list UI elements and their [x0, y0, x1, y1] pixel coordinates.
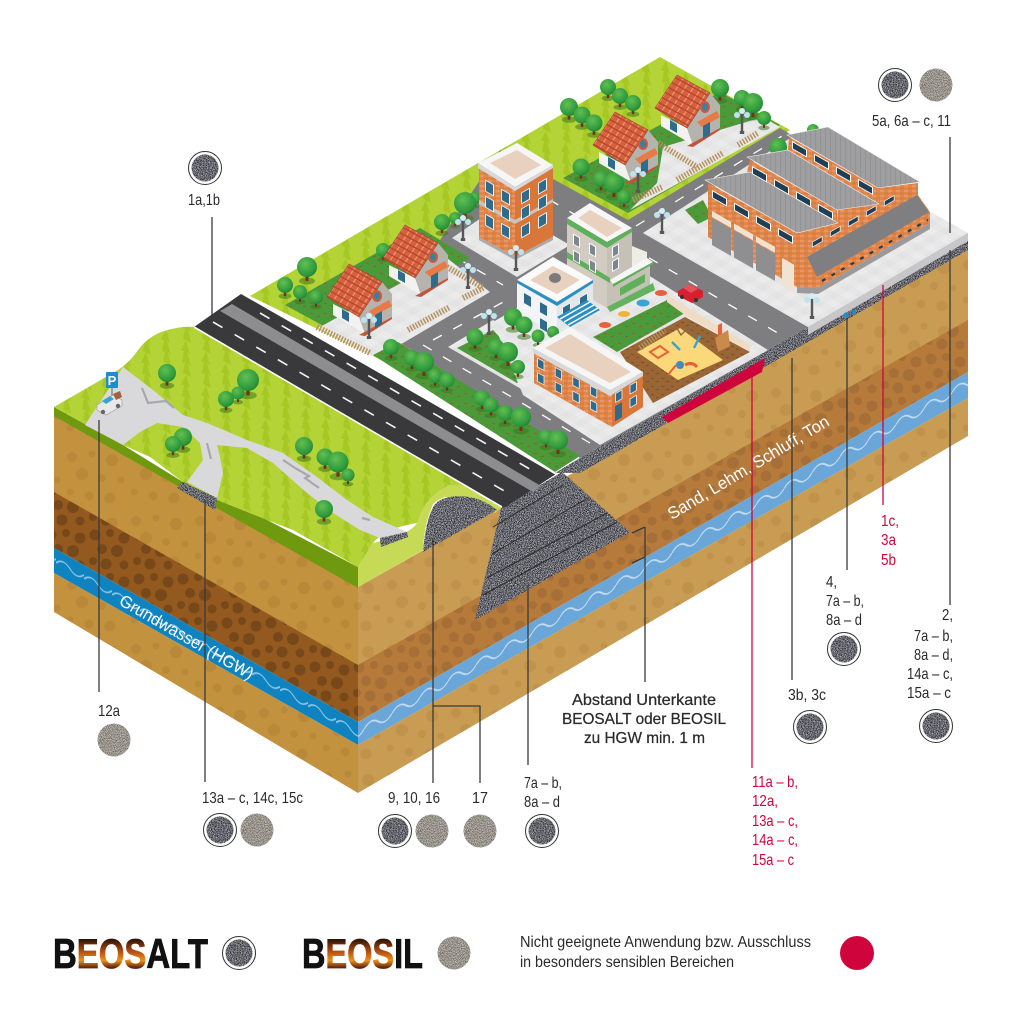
blue and white building	[517, 257, 600, 335]
houses	[327, 75, 720, 336]
right face lower sand layer	[358, 398, 968, 793]
playground dirt	[620, 317, 750, 403]
right face upper sand layer	[358, 245, 968, 667]
callout: groundwater distance: zu HGW min. 1 m	[584, 730, 705, 747]
label: 12a: 12a	[98, 703, 120, 720]
factory hall	[705, 127, 930, 294]
left face groundwater layer	[54, 548, 358, 745]
legend: exclusion text: Nicht geeignete Anwendung bzw. Ausschluss	[520, 934, 811, 951]
green and white building	[567, 203, 655, 312]
small block hedge	[457, 330, 533, 383]
callout: groundwater distance: Abstand Unterkante	[572, 692, 716, 709]
panel: motorway	[194, 291, 556, 508]
legend: BEOSIL wordmark: BEOSIL	[302, 930, 423, 977]
factory pavement	[643, 135, 968, 327]
label: 9, 10, 16	[378, 790, 448, 848]
red label: 11a-b to 15a-c	[752, 774, 798, 869]
green patch at factory	[685, 200, 712, 224]
callout: groundwater distance: BEOSALT oder BEOSIL	[562, 711, 726, 728]
factory lean-to windows	[822, 220, 928, 281]
label: 2, 7a-b, 8a-d, 14a-c, 15a-c: 14a – c,	[907, 666, 953, 683]
sandpit	[637, 328, 723, 380]
factory front wall	[708, 183, 797, 287]
factory rear wall with windows	[788, 137, 879, 204]
road surface	[194, 294, 556, 508]
factory windows	[712, 141, 894, 248]
red label: 1c, 3a, 5b: 5b	[881, 552, 896, 569]
red car	[678, 284, 703, 303]
label: 4, 7a-b, 8a-d	[826, 574, 864, 666]
legend	[53, 930, 874, 977]
red label: 1c, 3a, 5b	[881, 513, 899, 569]
panel: town platform	[250, 57, 968, 473]
panel: green field on embankment	[54, 327, 502, 588]
red label: 11a-b to 15a-c: 12a,	[752, 793, 778, 810]
low brick building	[533, 327, 643, 427]
playground equipment	[650, 320, 730, 375]
centre block pavement	[493, 245, 768, 445]
panel: soil block right face	[358, 245, 968, 793]
legend: BEOSALT wordmark: BEOSALT	[53, 930, 208, 977]
parked car	[97, 391, 122, 415]
road median	[220, 304, 541, 492]
playground fence wall	[667, 295, 750, 352]
label: 2, 7a-b, 8a-d, 14a-c, 15a-c: 8a – d,	[914, 647, 953, 664]
light green hill slope	[358, 485, 502, 587]
label: 5a, 6a–c, 11: 5a, 6a – c, 11	[872, 113, 951, 130]
road embankment gravel wedge	[475, 472, 630, 620]
label: 17	[464, 790, 496, 848]
street lamps	[361, 108, 820, 339]
label: 3b, 3c	[788, 687, 826, 744]
label: 7a-b, 8a-d: 7a – b,	[524, 775, 562, 792]
factory front roof	[705, 172, 838, 233]
label: 4, 7a-b, 8a-d: 7a – b,	[826, 593, 864, 610]
right face dark gravel layer	[358, 320, 968, 722]
gravel path	[85, 367, 407, 538]
lane dashes	[213, 313, 540, 496]
label: 13a-c, 14c, 15c	[202, 790, 303, 846]
small block pavement	[448, 320, 540, 390]
factory lean-to roof	[807, 195, 929, 277]
label: 1a,1b: 1a,1b	[188, 192, 220, 209]
layer label: groundwater: Grundwasser (HGW)	[116, 591, 257, 683]
tall brick building	[478, 143, 553, 260]
leader lines	[99, 137, 950, 783]
callout: groundwater distance	[562, 692, 726, 747]
label: 1a,1b	[188, 152, 222, 209]
platform edge gravel	[555, 233, 968, 473]
factory plinth	[797, 223, 930, 294]
factory gates	[712, 211, 794, 292]
label: 2, 7a-b, 8a-d, 14a-c, 15a-c	[907, 607, 953, 742]
trees in street blocks	[383, 308, 568, 458]
legend: red dot	[840, 936, 874, 970]
label: 4, 7a-b, 8a-d: 8a – d	[826, 612, 862, 629]
label: 2, 7a-b, 8a-d, 14a-c, 15a-c: 2,	[942, 607, 953, 624]
factory rear roof	[787, 127, 920, 188]
label: 7a-b, 8a-d: 8a – d	[524, 794, 560, 811]
street network	[400, 128, 808, 458]
parking sign: P	[108, 373, 117, 388]
label: 2, 7a-b, 8a-d, 14a-c, 15a-c: 7a – b,	[914, 628, 953, 645]
label: 3b, 3c: 3b, 3c	[788, 687, 826, 704]
field dark green side edge	[54, 407, 358, 588]
gravel cut in path	[177, 482, 217, 510]
legend: BEOSALT sample	[222, 936, 256, 970]
legend: exclusion text	[520, 934, 811, 971]
red label: 11a-b to 15a-c: 13a – c,	[752, 813, 798, 830]
red label: 11a-b to 15a-c: 15a – c	[752, 852, 794, 869]
left house block garden	[285, 228, 470, 335]
factory side brick wall	[797, 183, 930, 288]
lime grass behind town	[250, 57, 790, 362]
factory middle wall with windows	[747, 160, 838, 223]
trees behind factory and lime strip	[277, 79, 819, 309]
red exclusion strip	[662, 358, 765, 423]
left house block pavement	[318, 258, 490, 356]
right face groundwater layer	[358, 372, 968, 745]
red label: 1c, 3a, 5b: 1c,	[881, 513, 899, 530]
brick building block pavement	[452, 205, 570, 277]
upper house block garden	[563, 92, 780, 213]
red label: 11a-b to 15a-c: 11a – b,	[752, 774, 798, 791]
roadside hedge strip	[373, 342, 580, 472]
label: 9, 10, 16: 9, 10, 16	[388, 790, 440, 807]
legend: exclusion text: in besonders sensiblen Bereichen	[520, 954, 734, 971]
left face upper sand layer	[54, 410, 358, 670]
red label: 11a-b to 15a-c: 14a – c,	[752, 832, 798, 849]
factory middle roof	[747, 150, 879, 210]
label: 7a-b, 8a-d	[524, 775, 562, 848]
label: 17: 17	[472, 790, 488, 807]
platform pavement lip	[808, 233, 968, 335]
label: 4, 7a-b, 8a-d: 4,	[826, 574, 837, 591]
label: 5a, 6a–c, 11	[872, 68, 952, 130]
red label: 1c, 3a, 5b: 3a	[881, 532, 896, 549]
garden fences	[317, 133, 758, 353]
field surface	[54, 327, 502, 567]
left face dark gravel layer	[54, 492, 358, 722]
parasols	[599, 290, 667, 328]
label: 13a-c, 14c, 15c: 13a – c, 14c, 15c	[202, 790, 303, 807]
road edge lines	[194, 291, 556, 507]
trees on the field	[158, 364, 354, 525]
label: 2, 7a-b, 8a-d, 14a-c, 15a-c: 15a – c	[907, 685, 951, 702]
icon: blue pipe openings	[844, 310, 856, 318]
left face lower sand layer	[54, 573, 358, 793]
label: 12a	[98, 703, 130, 756]
upper house block pavement	[630, 117, 780, 210]
path markings	[142, 388, 370, 520]
gravel end of path	[380, 532, 408, 547]
legend: BEOSIL sample	[438, 936, 470, 970]
panel: soil block left face	[54, 410, 358, 793]
layer label: sand: Sand, Lehm, Schluff, Ton	[664, 412, 833, 523]
gravel core under hill	[423, 496, 497, 552]
parking sign	[106, 372, 118, 396]
playground lawn	[593, 300, 685, 352]
street dashes	[423, 133, 788, 443]
